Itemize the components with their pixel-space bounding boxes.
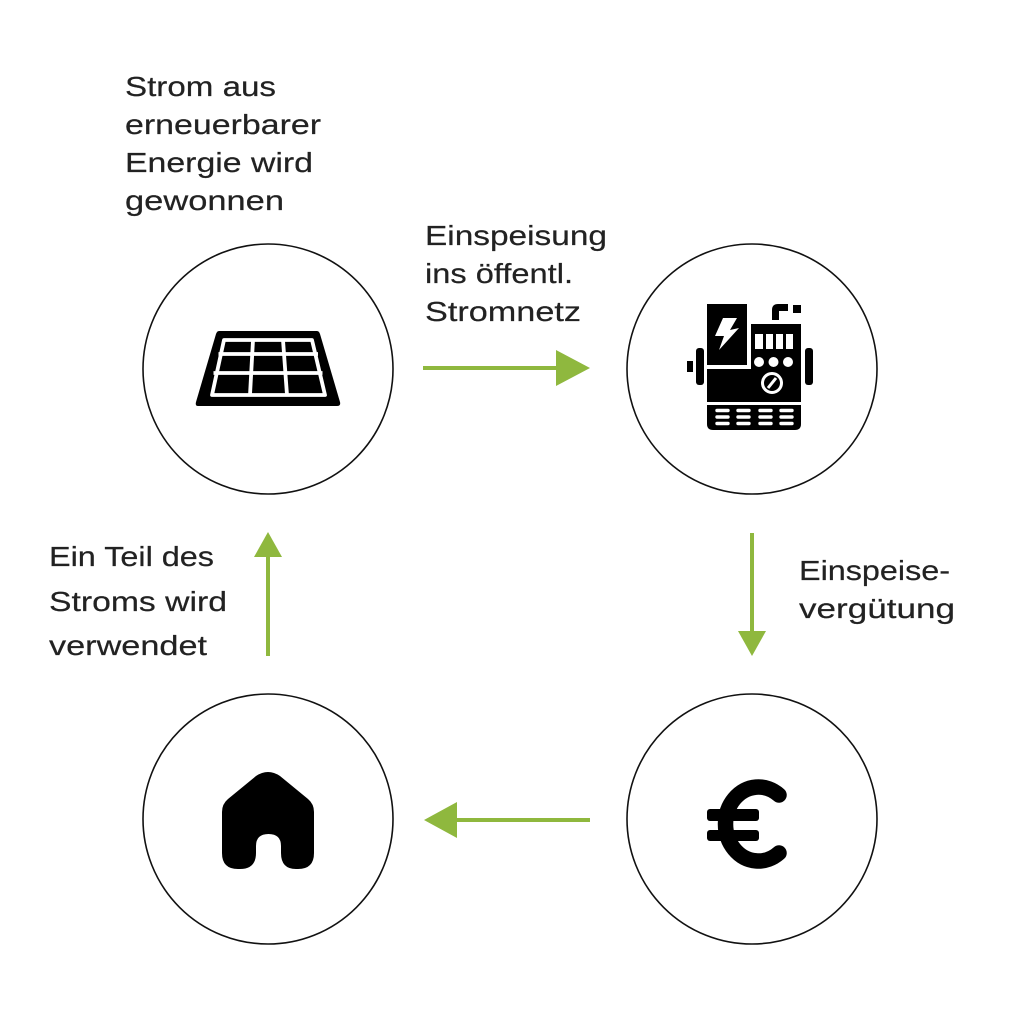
arrow: solar to grid [423,350,590,386]
text: part of electricity used [49,541,227,661]
icon: solar panel [196,331,340,406]
text: part of electricity used: Stroms wird [49,586,227,617]
text: feed into public grid [425,220,607,327]
circle: euro [627,694,877,944]
text: renewable energy generated: gewonnen [125,185,284,216]
text: feed into public grid: Stromnetz [425,296,581,327]
text: renewable energy generated [125,71,321,216]
panel: euro node [627,694,877,944]
text: feed into public grid: Einspeisung [425,220,607,251]
circle: house [143,694,393,944]
icon: euro sign [707,787,779,861]
text: feed-in tariff [799,555,955,624]
text: renewable energy generated: Strom aus [125,71,276,102]
arrow: grid to euro [738,533,766,656]
text: feed-in tariff: vergütung [799,593,955,624]
icon: generator [687,304,813,430]
text: renewable energy generated: Energie wird [125,147,313,178]
circle: generator [627,244,877,494]
arrow: house to solar [254,532,282,656]
arrow: euro to house [424,802,590,838]
panel: generator node [627,244,877,494]
text: renewable energy generated: erneuerbarer [125,109,321,140]
text: feed-in tariff: Einspeise- [799,555,950,586]
panel: house node [143,694,393,944]
circle: solar [143,244,393,494]
text: part of electricity used: Ein Teil des [49,541,214,572]
text: part of electricity used: verwendet [49,630,207,661]
panel: solar panel node [143,244,393,494]
text: feed into public grid: ins öffentl. [425,258,573,289]
icon: house [222,772,314,869]
